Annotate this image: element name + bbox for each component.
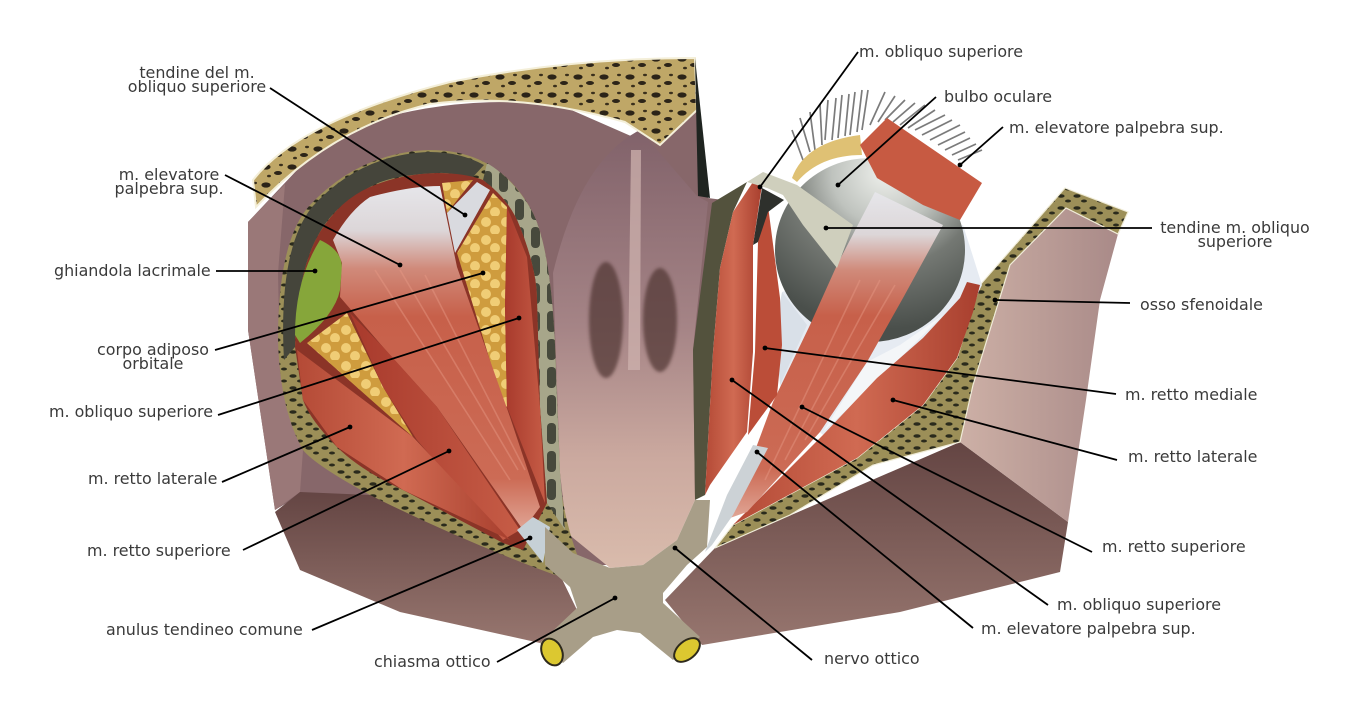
label: m. elevatore palpebra sup. left: palpebra sup.	[114, 179, 224, 198]
panel: dark upper arc of left orbit	[283, 152, 484, 360]
muscle: superior rectus right	[730, 192, 943, 518]
label: chiasma ottico	[374, 598, 615, 671]
label: m. obliquo superiore top	[760, 42, 1023, 187]
label: m. elevatore palpebra sup. lower right: m. elevatore palpebra sup.	[981, 619, 1196, 638]
label: m. retto superiore right: m. retto superiore	[1102, 537, 1246, 556]
label: m. retto laterale right	[893, 400, 1257, 466]
label: corpo adiposo orbitale	[97, 273, 483, 373]
panel: sphenoid bone right	[715, 188, 1128, 548]
label: corpo adiposo orbitale: orbitale	[123, 354, 183, 373]
label: m. obliquo superiore lower right	[732, 380, 1221, 614]
panel: optic chiasm	[537, 500, 710, 669]
label: m. elevatore palpebra sup. left: m. elevatore	[119, 165, 219, 184]
label: bulbo oculare	[838, 87, 1052, 185]
panel: frontal bone top	[253, 58, 697, 207]
label: anulus tendineo comune: anulus tendineo comune	[106, 620, 303, 639]
icon: right nerve cut	[670, 633, 704, 667]
panel: right lower floor	[665, 442, 1068, 645]
label: m. elevatore palpebra sup. top	[960, 118, 1224, 165]
label: m. retto laterale left	[88, 427, 350, 488]
panel: dark edge of roof	[695, 58, 710, 198]
muscle: superior oblique right	[705, 182, 762, 495]
label: tendine del m. obliquo superiore: tendine del m.	[139, 63, 255, 82]
panel: white gap tissue	[823, 315, 943, 432]
label: m. retto superiore left: m. retto superiore	[87, 541, 231, 560]
icon: left tendon ring	[517, 517, 550, 563]
label: tendine m. obliquo superiore: superiore	[1198, 232, 1272, 251]
panel: dark nasal strip	[693, 182, 747, 500]
panel: blue tissue below eye	[775, 292, 807, 385]
panel: orbital fat pads	[307, 180, 507, 437]
icon: lacrimal gland	[295, 240, 342, 343]
label: corpo adiposo orbitale: corpo adiposo	[97, 340, 209, 359]
label: bulbo oculare: bulbo oculare	[944, 87, 1052, 106]
label: osso sfenoidale: osso sfenoidale	[1140, 295, 1263, 314]
icon: yellow fat arc	[792, 135, 862, 182]
muscle: levator palpebrae left	[333, 186, 540, 530]
muscle: lateral rectus left	[297, 350, 510, 540]
label: tendine del m. obliquo superiore: obliquo superiore	[128, 77, 266, 96]
muscle: superior oblique tendon	[747, 172, 853, 268]
label: chiasma ottico: chiasma ottico	[374, 652, 491, 671]
label: tendine m. obliquo superiore: tendine m. obliquo	[1160, 218, 1310, 237]
muscle: lateral rectus right	[733, 282, 980, 525]
panel: right orbit muscles and eye	[693, 90, 982, 552]
label: m. obliquo superiore lower right: m. obliquo superiore	[1057, 595, 1221, 614]
panel: right side air cells of left orbit	[483, 163, 565, 530]
label: osso sfenoidale	[995, 295, 1263, 314]
panel: left orbit cavity	[295, 173, 547, 550]
icon: dark gap near trochlea	[753, 188, 784, 245]
label: nervo ottico	[675, 548, 920, 668]
label: m. retto laterale right: m. retto laterale	[1128, 447, 1257, 466]
muscle: tendon of superior oblique left	[447, 182, 490, 253]
panel: left orbit bony rim	[278, 150, 585, 575]
label: m. retto mediale: m. retto mediale	[1125, 385, 1257, 404]
panel: left orbit muscles	[297, 182, 545, 540]
label: ghiandola lacrimale: ghiandola lacrimale	[54, 261, 211, 280]
label: m. obliquo superiore left: m. obliquo superiore	[49, 402, 213, 421]
label: tendine m. obliquo superiore	[826, 218, 1310, 251]
muscle: rectus fibres right	[765, 280, 895, 480]
label: m. elevatore palpebra sup. top: m. elevatore palpebra sup.	[1009, 118, 1224, 137]
icon: left nerve cut	[537, 635, 567, 669]
panel: nasal central wall	[553, 130, 708, 568]
panel: right wall	[960, 208, 1118, 522]
icon: eyelashes	[792, 90, 982, 160]
label: m. retto superiore right	[802, 407, 1246, 556]
muscle: levator stump	[860, 118, 982, 220]
label: m. elevatore palpebra sup. left	[114, 165, 400, 265]
muscle: superior oblique left	[505, 207, 545, 503]
label: m. retto superiore left	[87, 451, 449, 560]
label: m. retto laterale left: m. retto laterale	[88, 469, 217, 488]
muscle: levator fibres left	[375, 270, 525, 480]
panel: pale tissue	[780, 225, 982, 435]
muscle: right tendon ring	[705, 445, 768, 552]
label: tendine del m. obliquo superiore	[128, 63, 465, 215]
panel: left lower floor	[275, 492, 577, 643]
muscle: medial rectus right	[748, 198, 782, 435]
label: anulus tendineo comune	[106, 538, 530, 639]
label: m. obliquo superiore left	[49, 318, 519, 421]
label: m. elevatore palpebra sup. lower right	[757, 452, 1196, 638]
label: m. obliquo superiore top: m. obliquo superiore	[859, 42, 1023, 61]
icon: eyeball	[775, 158, 965, 342]
panel: left orbit wall	[248, 100, 723, 570]
label: nervo ottico: nervo ottico	[824, 649, 920, 668]
muscle: superior rectus left	[350, 313, 520, 540]
label: m. retto mediale	[765, 348, 1257, 404]
